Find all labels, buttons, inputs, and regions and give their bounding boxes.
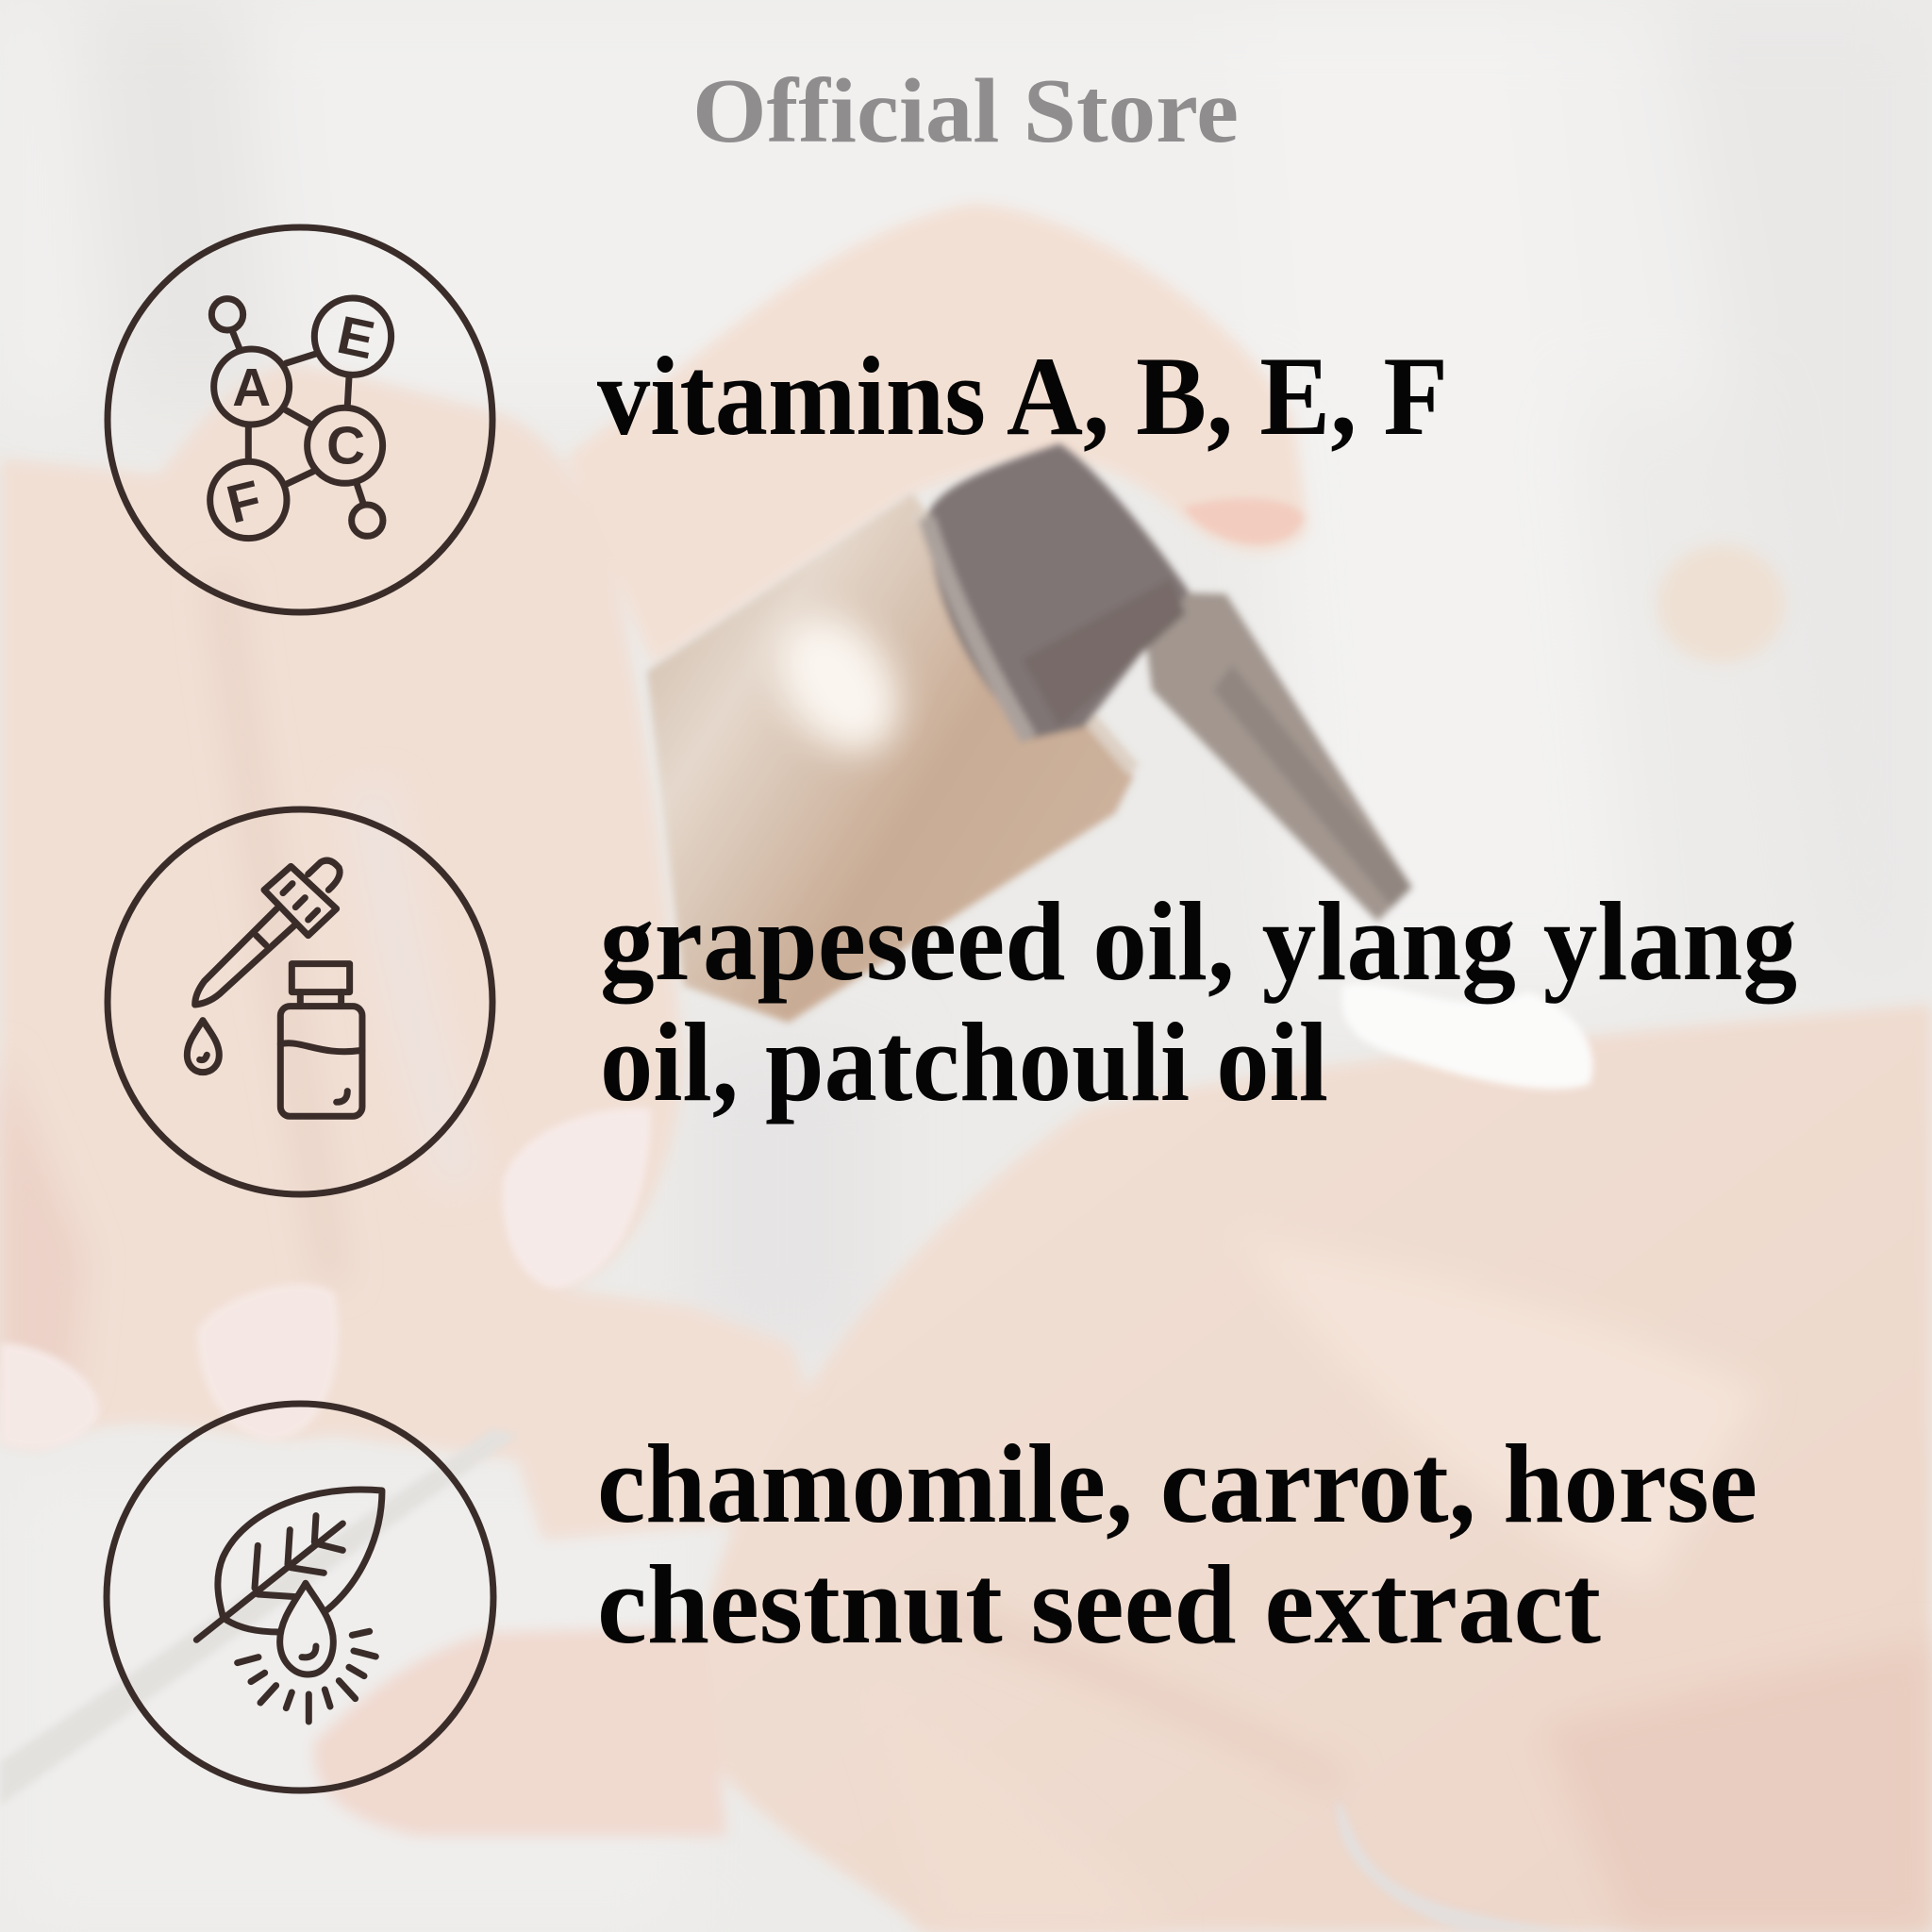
left hand mass — [0, 365, 808, 1541]
text: extracts: chamomile, carrot, horse — [597, 1421, 1757, 1546]
pen-like grey stripe — [0, 1429, 518, 1805]
icon: vitamins circle: A — [232, 358, 271, 418]
text: oils — [600, 878, 1797, 1124]
pump spout — [1140, 591, 1412, 922]
spot — [1657, 544, 1786, 663]
text: extracts — [597, 1421, 1757, 1667]
lower thumb — [314, 1626, 727, 1836]
bottle rim — [914, 511, 1134, 770]
icon: vitamins circle: C — [326, 417, 365, 476]
pump collar — [926, 443, 1189, 740]
nails — [502, 1108, 651, 1289]
text: oils: grapeseed oil, ylang ylang — [600, 878, 1797, 1005]
icon: dropper and bottle — [108, 809, 492, 1194]
icon: vitamins circle: F — [221, 470, 267, 535]
finger shadows — [222, 579, 333, 1281]
upper finger — [567, 204, 1308, 665]
text: oils: oil, patchouli oil — [600, 999, 1328, 1124]
icon: leaf and drop — [107, 1404, 493, 1790]
right hand — [690, 1004, 1932, 1932]
text: vitamins: vitamins A, B, E, F — [597, 333, 1448, 458]
bottle body — [647, 492, 1134, 1023]
title: Official Store — [692, 60, 1239, 162]
icon: vitamins circle — [108, 227, 492, 612]
cream — [1341, 984, 1592, 1089]
text: extracts: chestnut seed extract — [597, 1541, 1601, 1667]
icon: vitamins circle: E — [332, 306, 379, 371]
ring — [1337, 1799, 1577, 1932]
